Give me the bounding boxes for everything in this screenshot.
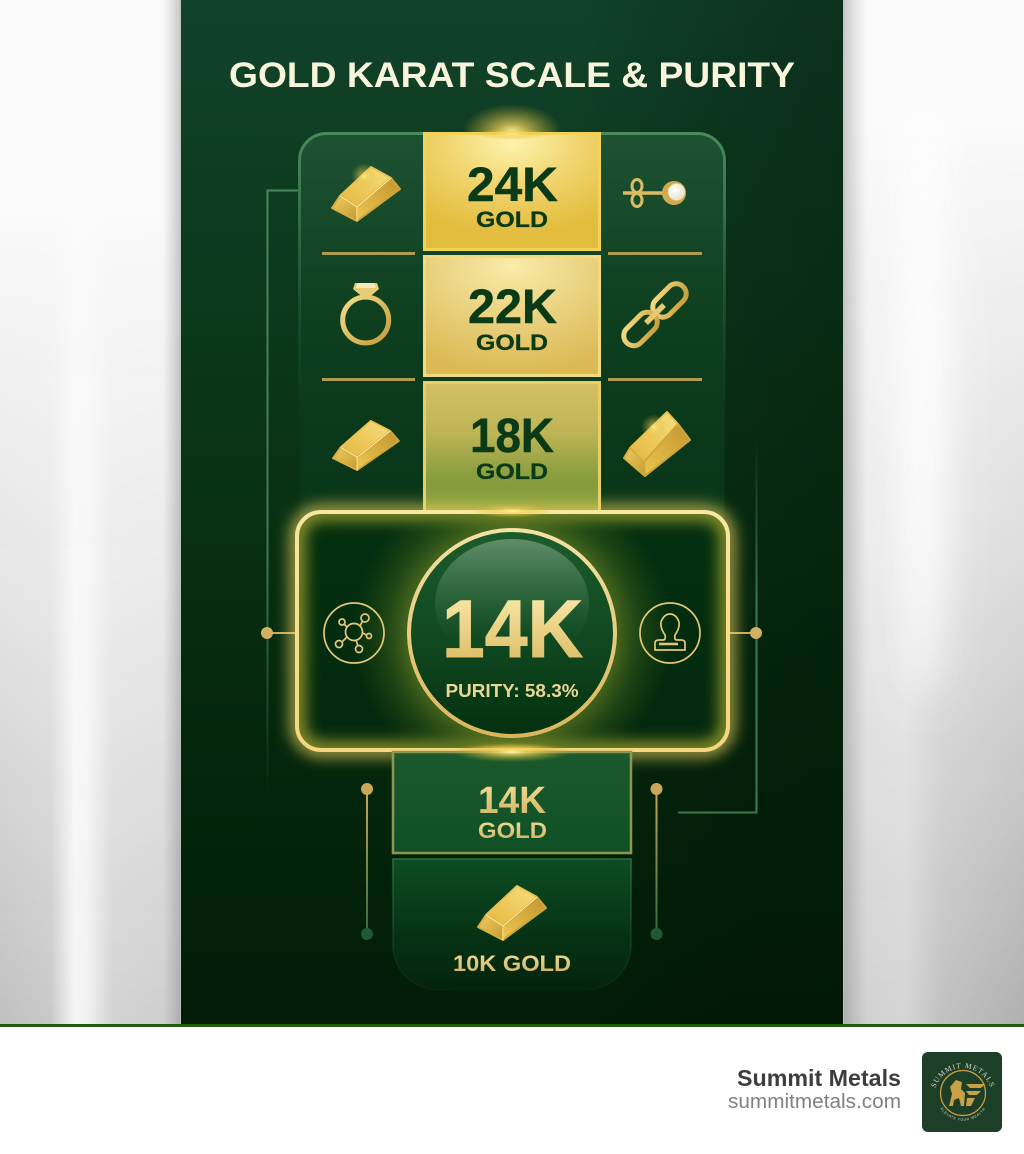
footer rule [0,1024,1024,1027]
bar: 22K gold: GOLD [476,330,548,355]
icon: gold bar, 24K left [332,163,400,221]
card: 14K highlight [297,473,728,793]
brand: name and URL [728,1065,901,1113]
medallion: 14K purity: PURITY: 58.3% [446,681,578,701]
connector: right pin [650,783,662,940]
connector: left pin [361,783,373,940]
connector: right circuit line [678,440,762,812]
icon: hallmark stamp badge [640,603,700,663]
bar: 24K gold: GOLD [476,207,548,232]
bar: 22K gold [424,256,600,376]
icon: diamond ring [343,283,389,343]
bar: 22K gold: 22K [468,281,557,334]
panel: dark green poster [180,0,844,1024]
bar: 10K gold: 10K GOLD [453,951,571,976]
bar: 14K gold [393,752,631,853]
bar: 18K gold [424,382,600,512]
medallion: 14K purity: 14K [442,584,583,675]
bar: 14K gold: 14K [478,780,547,822]
bar: 24K gold: 24K [467,159,558,212]
icon: molecule badge [324,603,384,663]
flare: below 14K card [452,742,572,762]
brand: logo badge [922,1052,1002,1132]
brand: name and URL: Summit Metals [737,1065,901,1091]
icon: pearl stud earring [623,180,686,206]
flare: top of scale [462,104,562,160]
brand: logo badge: ELEVATE YOUR WEALTH [940,1107,985,1121]
bar: 10K gold [393,859,631,990]
medallion: 14K purity [409,530,615,736]
row dividers [322,252,702,381]
bar: 18K gold: GOLD [476,459,548,484]
panel: upper scale frame [300,133,724,530]
bar: 24K gold [424,128,600,250]
bar: 14K gold: GOLD [478,818,547,843]
icon: gold bar, 18K right [624,412,690,476]
brand: logo badge: SUMMIT METALS [931,1063,994,1088]
icon: gold bar, 18K left [333,421,399,470]
brand: name and URL: summitmetals.com [728,1091,901,1113]
icon: chain links [620,280,690,350]
title: GOLD KARAT SCALE & PURITY [229,56,795,95]
bar: 18K gold: 18K [470,410,554,463]
connector: left circuit line [261,190,298,800]
